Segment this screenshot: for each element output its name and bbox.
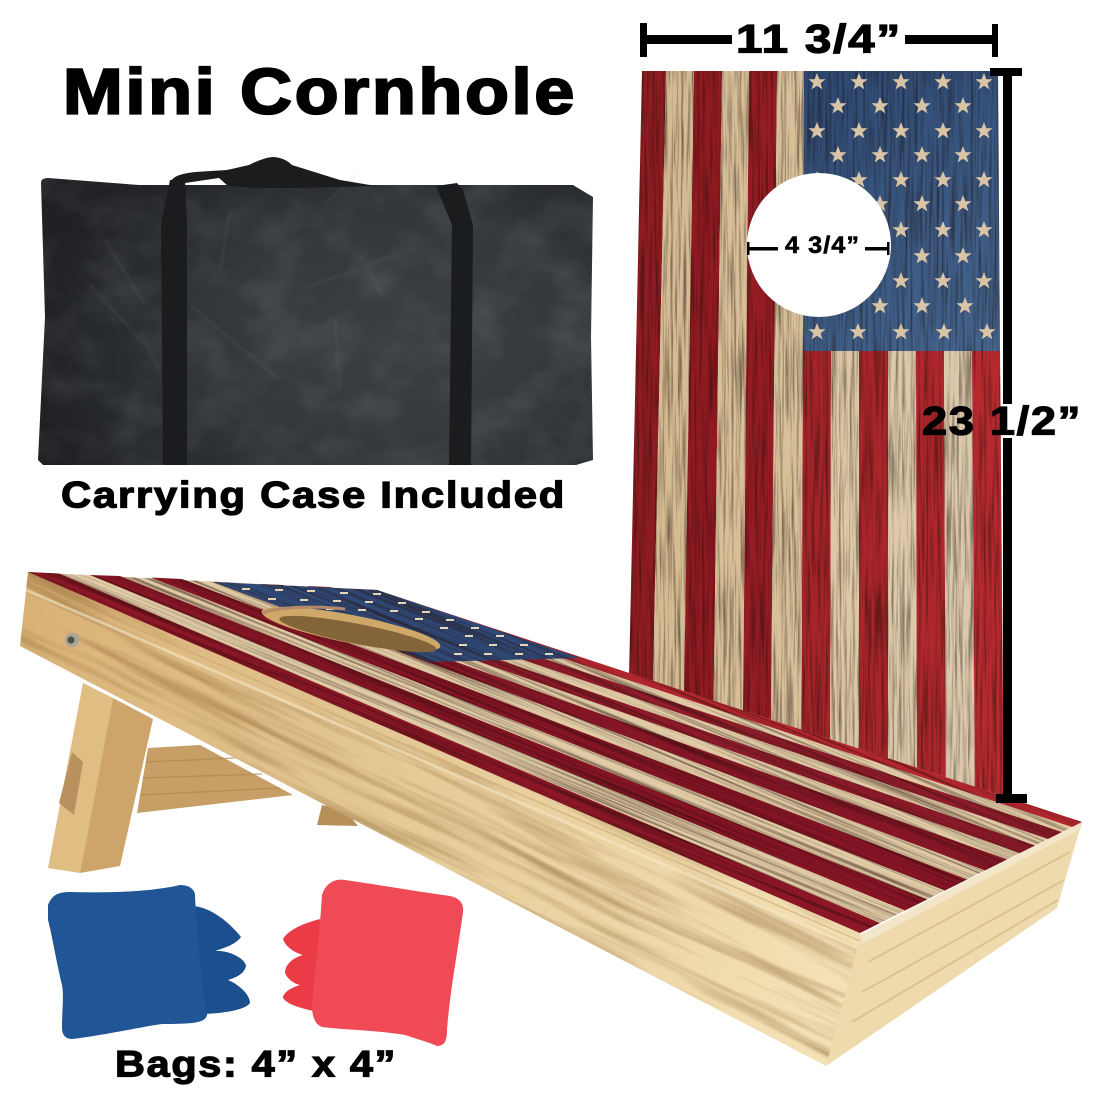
hole dimension bbox=[747, 232, 890, 259]
board end face bbox=[826, 822, 1082, 1066]
board hole bbox=[747, 173, 891, 317]
stacked blue bags bbox=[190, 906, 250, 1014]
perspective stars bbox=[242, 589, 553, 654]
upright flag board bbox=[626, 71, 1004, 820]
flag surface bbox=[28, 572, 1082, 933]
board long side bbox=[20, 572, 862, 1066]
wood flag stripes bbox=[626, 71, 1004, 820]
blue bean bags bbox=[48, 885, 250, 1039]
rear leg bbox=[317, 805, 358, 826]
red bean bags bbox=[283, 880, 463, 1046]
left strap bbox=[161, 180, 187, 465]
rear cross brace bbox=[137, 745, 293, 813]
case caption: Carrying Case Included bbox=[61, 474, 566, 516]
stacked red bags bbox=[283, 918, 325, 1012]
hole dimension line bbox=[747, 242, 890, 255]
bags caption: Bags: 4” x 4” bbox=[115, 1044, 397, 1084]
title: Mini Cornhole bbox=[63, 56, 577, 128]
bolt bbox=[65, 633, 79, 647]
height dimension line bbox=[990, 68, 1027, 803]
front blue bag bbox=[48, 885, 207, 1039]
angled cornhole board bbox=[20, 572, 1082, 1066]
case body bbox=[38, 178, 593, 465]
front leg bbox=[48, 683, 153, 873]
fabric creases bbox=[90, 175, 395, 390]
height label: 23 1/2” bbox=[922, 400, 1082, 444]
right strap bbox=[436, 183, 473, 465]
canton stars bbox=[808, 73, 996, 339]
width dimension line bbox=[640, 23, 998, 57]
front red bag bbox=[312, 880, 463, 1046]
carrying case photo bbox=[38, 157, 593, 465]
board hole perspective bbox=[259, 598, 443, 660]
hole label: 4 3/4” bbox=[785, 232, 860, 259]
height dimension bbox=[922, 68, 1082, 803]
width label: 11 3/4” bbox=[736, 18, 902, 62]
carrying handle bbox=[170, 157, 376, 188]
width dimension bbox=[640, 18, 998, 62]
